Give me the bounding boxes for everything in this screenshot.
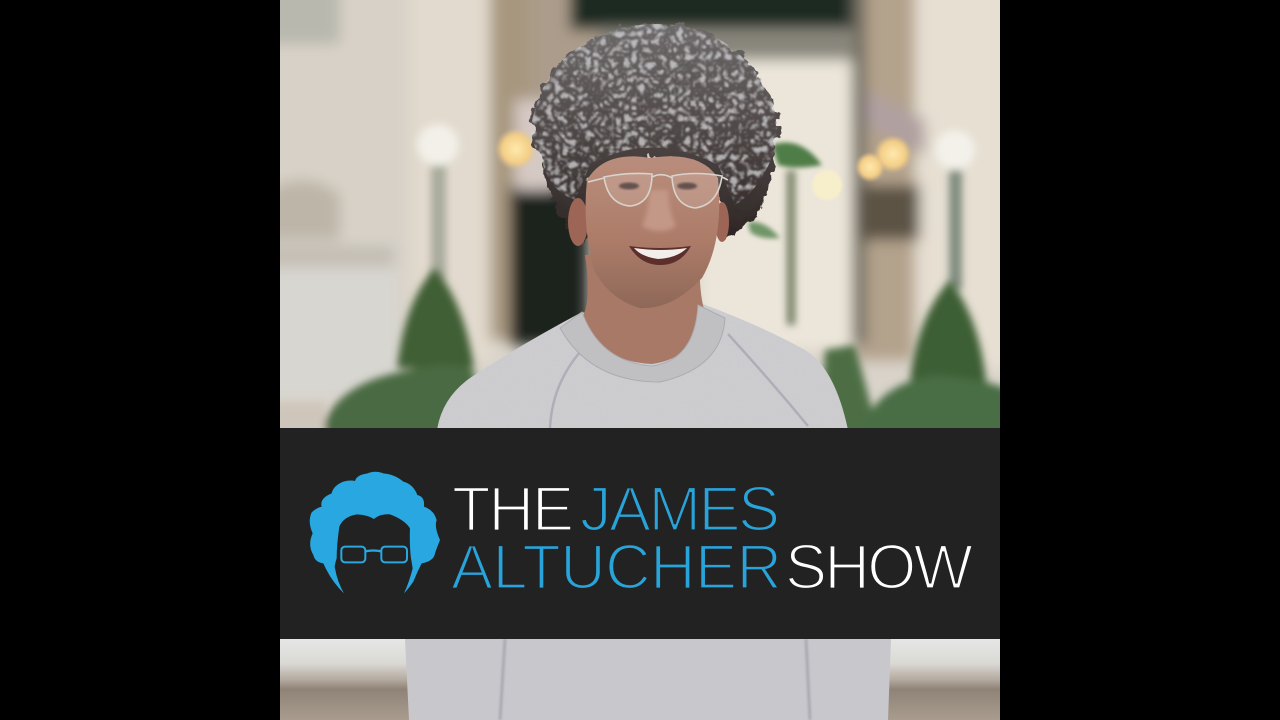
podcast cover scene [280,0,1000,720]
person: eyes [619,182,697,190]
ALTUCHER: ALTUCHER [451,532,782,602]
person: collar [560,305,725,382]
person: ears [568,198,729,246]
photo: lower stone ledge [280,639,1000,720]
person: face [586,156,719,308]
topiary and hedges [270,268,1015,442]
logo glasses [341,547,407,562]
person: hair curl texture [531,24,777,205]
plant leaves [748,142,822,238]
person: glasses [588,173,728,208]
person: hair back [531,24,777,245]
logo: blue hair silhouette with glasses [310,472,440,593]
sweater lower body [405,639,891,720]
THE: THE [452,474,574,544]
lamp posts [417,124,975,325]
photo: blurred street background [260,0,1015,442]
JAMES: JAMES [580,474,780,544]
person: nose and cheeks shadow [642,190,676,231]
warm lights [495,128,912,200]
SHOW: SHOW [785,532,974,602]
person: neck [582,250,706,364]
dark title banner [280,428,1000,639]
person: sweater shoulders [437,303,848,430]
person: smile [629,246,691,265]
title wordmark [451,474,974,602]
